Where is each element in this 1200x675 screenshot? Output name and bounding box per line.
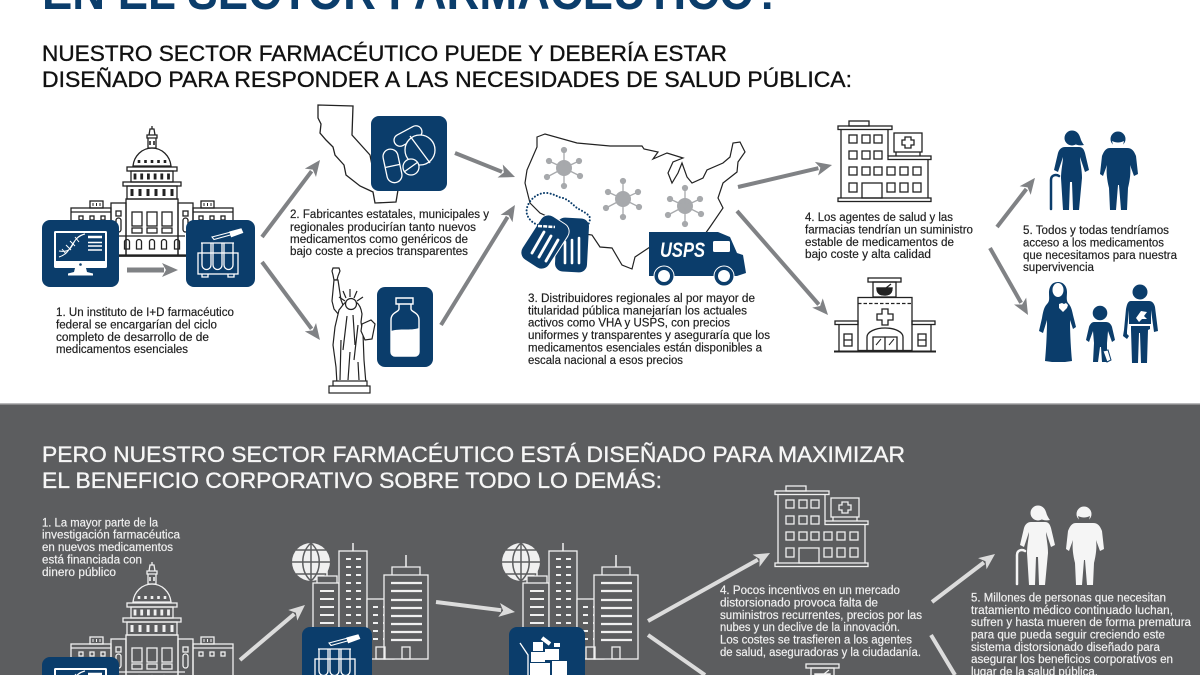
icon: corporate city 1 [292,543,428,659]
heading: reality sector [42,442,905,493]
icon: vial [377,287,433,367]
icon: dog tags [517,193,590,273]
icon: Statue of Liberty [329,268,375,393]
text: step 1 [56,307,234,356]
text: step 5: 5. Todos y todas tendríamos [1023,225,1169,237]
icon: corporate city 2 [502,543,638,659]
heading: reality sector: EL BENEFICIO CORPORATIVO SOBRE TODO LO DEMÁS: [42,468,662,493]
arrow: to health agents [738,168,818,187]
text: step 3: uniformes y transparentes y aseguraría que los [528,330,770,342]
heading: ideal sector [42,41,852,92]
text: step 1: 1. Un instituto de I+D farmacéutico [56,307,234,319]
icon: hospital [838,121,931,202]
arrow: to municipal manufacturers [262,262,312,329]
text: reality step 4: Los costes se trasfieren a los agentes [720,634,912,646]
text: reality step 4 [720,585,922,659]
heading: reality sector: PERO NUESTRO SECTOR FARMACÉUTICO ESTÁ DISEÑADO PARA MAXIMIZAR [42,442,905,467]
text: reality step 1: investigación farmacéutica [42,530,181,542]
heading: ideal sector: DISEÑADO PARA RESPONDER A LAS NECESIDADES DE SALUD PÚBLICA: [42,67,852,92]
text: step 4: 4. Los agentes de salud y las [805,212,953,224]
arrow: to health agents, reality [648,560,758,621]
panel: reality [0,403,1200,675]
arrow: municipal to distributors [441,217,508,325]
text: step 1: federal se encargarían del ciclo [56,320,217,332]
icon: hospital, reality [775,486,868,566]
text: step 5: acceso a los medicamentos [1023,238,1164,250]
arrow: corporation to corporation [436,602,501,610]
text: reality step 4: nubes y un declive de la innovación. [720,622,900,634]
text: step 4 [805,212,973,261]
text: step 1: medicamentos esenciales [56,344,188,356]
text: step 2: regionales producirían tanto nuevos [290,222,476,234]
arrow: to corporations [240,614,294,660]
text: reality step 1: está financiada con [42,554,142,566]
icon: test tubes, reality [302,627,372,675]
text: step 5: supervivencia [1023,262,1095,274]
icon: California map [318,105,398,203]
icon: elderly couple [1051,130,1138,210]
text: step 2: bajo coste a precios transparentes [290,246,468,258]
arrow: to patients top [997,189,1026,227]
icon: pills [371,116,447,191]
text: reality step 5: asegurar los beneficios corporativos en [971,654,1173,666]
icon: elderly couple, reality [1017,506,1104,585]
icon: family of patients [1039,282,1158,363]
text: reality step 5: 5. Millones de personas que necesitan [971,592,1166,604]
text: step 3 [528,293,770,367]
icon: USPS truck [649,232,746,286]
text: reality step 5: sistema distorsionado diseñado para [971,642,1161,654]
text: reality step 5: tratamiento médico continuado luchan, [971,605,1173,617]
icon: capitol building, reality [68,562,236,675]
arrow: research to testing [127,268,164,272]
text: step 4: bajo coste y alta calidad [805,249,931,261]
icon: USPS truck: USPS [660,239,705,262]
icon: capitol building [68,126,236,256]
text: step 1: completo de desarrollo de de [56,332,209,344]
icon: virus 1 [544,147,583,189]
arrow: to patients bottom, reality [931,635,955,675]
text: reality step 4: suministros recurrentes, precios por las [720,610,922,622]
text: reality step 4: 4. Pocos incentivos en un mercado [720,585,900,597]
text: step 3: escala nacional a esos precios [528,355,683,367]
text: reality step 5: sufren y hasta mueren de forma prematura [971,617,1192,629]
text: step 2: 2. Fabricantes estatales, municipales y [290,209,489,221]
text: step 4: farmacias tendrían un suministro [805,224,973,236]
text: step 2 [290,209,489,258]
arrow: to pharmacies [737,211,819,304]
icon: pharmacy [834,278,936,352]
heading: ideal sector: NUESTRO SECTOR FARMACÉUTICO PUEDE Y DEBERÍA ESTAR [42,41,727,66]
arrow: to pharmacies, reality [648,635,705,675]
text: reality step 1: en nuevos medicamentos [42,542,173,554]
icon: computer with DNA [42,220,119,287]
text: reality step 5: para que pueda seguir creciendo este [971,630,1165,642]
icon: US map [525,134,745,269]
text: step 5 [1023,225,1178,274]
icon: test tubes [186,220,255,287]
text: reality step 4: de salud, aseguradoras y la ciudadanía. [720,647,921,659]
arrow: to state manufacturers [262,171,312,237]
text: step 3: medicamentos esenciales están disponibles a [528,342,763,354]
icon: virus 3 [665,185,704,227]
text: reality step 1: 1. La mayor parte de la [42,518,159,530]
text: reality step 5 [971,592,1192,675]
text: step 4: estable de medicamentos de [805,237,954,249]
text: step 5: que necesitamos para nuestra [1023,250,1178,262]
icon: virus 2 [603,178,642,220]
icon: cart with boxes [509,627,585,675]
text: step 2: medicamentos como genéricos de [290,234,468,246]
text: step 3: titularidad pública manejarían los actuales [528,306,747,318]
text: step 3: 3. Distribuidores regionales al por mayor de [528,293,755,305]
arrow: state to distributors [455,153,502,172]
text: reality step 4: distorsionado provoca falta de [720,598,878,610]
icon: computer, reality [42,657,119,675]
text: reality step 1 [42,518,181,579]
text: step 3: activos como VHA y USPS, con precios [528,318,730,330]
icon: pharmacy, reality [772,664,874,675]
arrow: to patients bottom [990,248,1021,303]
arrow: to patients, reality [932,562,984,602]
text: reality step 1: dinero público [42,567,116,579]
